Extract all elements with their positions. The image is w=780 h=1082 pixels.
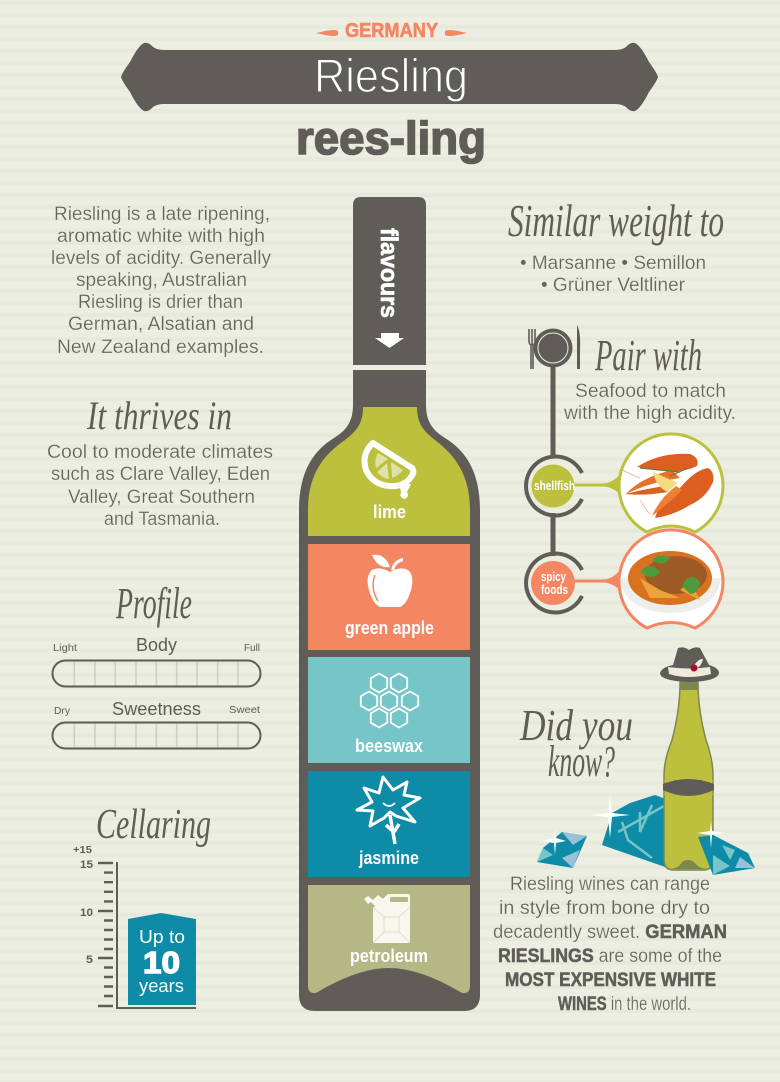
icon: jasmine flower (357, 777, 420, 844)
heading: cellaring: Cellaring (96, 802, 211, 848)
icon: apple (368, 555, 412, 607)
text: did you know: in style from bone dry to (499, 898, 710, 919)
chart: cellaring scale: 15 (80, 859, 93, 871)
pairing: shellfish (526, 434, 723, 532)
text: intro: Riesling is a late ripening, (54, 204, 270, 225)
text: did you know: WINES in the world. (558, 994, 691, 1015)
illustration: diamond front (697, 821, 755, 875)
text: climates: and Tasmania. (104, 509, 220, 530)
heading: country: GERMANY (345, 20, 439, 42)
text: intro (51, 204, 271, 358)
chart: cellaring scale: 10 (80, 907, 93, 919)
pronunciation heading: rees-ling (296, 112, 486, 164)
flavour: green apple (308, 544, 470, 650)
pairing: shellfish: shellfish (534, 478, 575, 493)
chart: sweetness scale (52, 699, 260, 748)
icon: plate and cutlery (529, 325, 580, 369)
flavour: petroleum (308, 885, 470, 993)
title banner: Riesling: Riesling (314, 49, 468, 102)
heading: did you know (519, 701, 633, 786)
heading: it thrives in: It thrives in (86, 393, 232, 438)
heading: profile: Profile (115, 579, 192, 628)
icon: hat (660, 647, 719, 682)
illustration: diamonds (537, 795, 668, 868)
text: did you know: MOST EXPENSIVE WHITE (505, 970, 716, 991)
title banner: Riesling (121, 43, 658, 111)
pairing: spicy foods (526, 530, 723, 628)
text: intro: aromatic white with high (57, 226, 265, 247)
chart: sweetness scale: Sweetness (112, 699, 201, 719)
text: pairing: with the high acidity. (563, 403, 736, 424)
text: intro: German, Alsatian and (68, 314, 254, 335)
timeline connector (550, 365, 556, 556)
chart: cellaring scale: 5 (86, 954, 93, 966)
flavour: beeswax (308, 657, 470, 763)
chart: body scale: Body (136, 635, 177, 655)
flavour: lime: lime (373, 502, 406, 522)
chart: body scale: Full (244, 642, 260, 654)
text: did you know (493, 874, 727, 1015)
icon: jerry can (364, 894, 410, 943)
text: climates: Valley, Great Southern (68, 487, 255, 508)
photo: crayfish (619, 434, 723, 532)
chart: cellaring scale (73, 844, 196, 1008)
text: climates (47, 442, 273, 530)
flavour: jasmine: jasmine (358, 848, 419, 868)
heading: did you know: know? (548, 737, 615, 786)
flavour: lime (308, 407, 470, 536)
heading: pair with: Pair with (594, 331, 702, 380)
bottle body (299, 370, 480, 1011)
text: similar grapes: • Marsanne • Semillon (520, 253, 706, 274)
heading: country (316, 20, 467, 42)
flavour: beeswax: beeswax (355, 736, 423, 756)
pairing: spicy foods: foods (541, 582, 568, 597)
icon: honeycomb (361, 674, 418, 728)
text: similar grapes: • Grüner Veltliner (541, 275, 686, 296)
wine bottle: flavours (299, 197, 480, 1011)
callout: up to 10 years: Up to (139, 927, 185, 947)
text: climates: such as Clare Valley, Eden (51, 464, 270, 485)
callout: up to 10 years: 10 (143, 945, 180, 980)
chart: sweetness scale: Dry (54, 705, 71, 717)
text: pairing: Seafood to match (575, 381, 726, 402)
text: did you know: RIESLINGS are some of the (498, 946, 722, 967)
bottle neck label: flavours (375, 228, 402, 318)
text: intro: speaking, Australian (76, 270, 247, 291)
illustration: bottle with hat (660, 647, 719, 870)
text: did you know: Riesling wines can range (510, 874, 710, 895)
photo: curry (619, 530, 723, 628)
chart: sweetness scale: Sweet (229, 704, 260, 716)
icon: lime (365, 443, 413, 499)
chart: cellaring scale: +15 (73, 844, 92, 856)
flavour: jasmine (308, 771, 470, 877)
text: intro: levels of acidity. Generally (51, 248, 271, 269)
flavour: green apple: green apple (345, 618, 434, 638)
text: intro: Riesling is drier than (78, 292, 243, 313)
bottle neck label (353, 197, 426, 365)
text: intro: New Zealand examples. (57, 337, 264, 358)
icon: sparkles (541, 795, 630, 855)
flavour: petroleum: petroleum (350, 946, 428, 966)
text: did you know: decadently sweet. GERMAN (493, 922, 727, 943)
heading: did you know: Did you (519, 701, 633, 750)
text: similar grapes (520, 253, 706, 296)
text: climates: Cool to moderate climates (47, 442, 273, 463)
chart: body scale: Light (53, 642, 77, 654)
chart: body scale (52, 635, 260, 686)
callout: up to 10 years: years (139, 976, 184, 996)
text: pairing (563, 381, 736, 424)
callout: up to 10 years (128, 913, 196, 1005)
pairing: spicy foods: spicy (541, 569, 567, 584)
